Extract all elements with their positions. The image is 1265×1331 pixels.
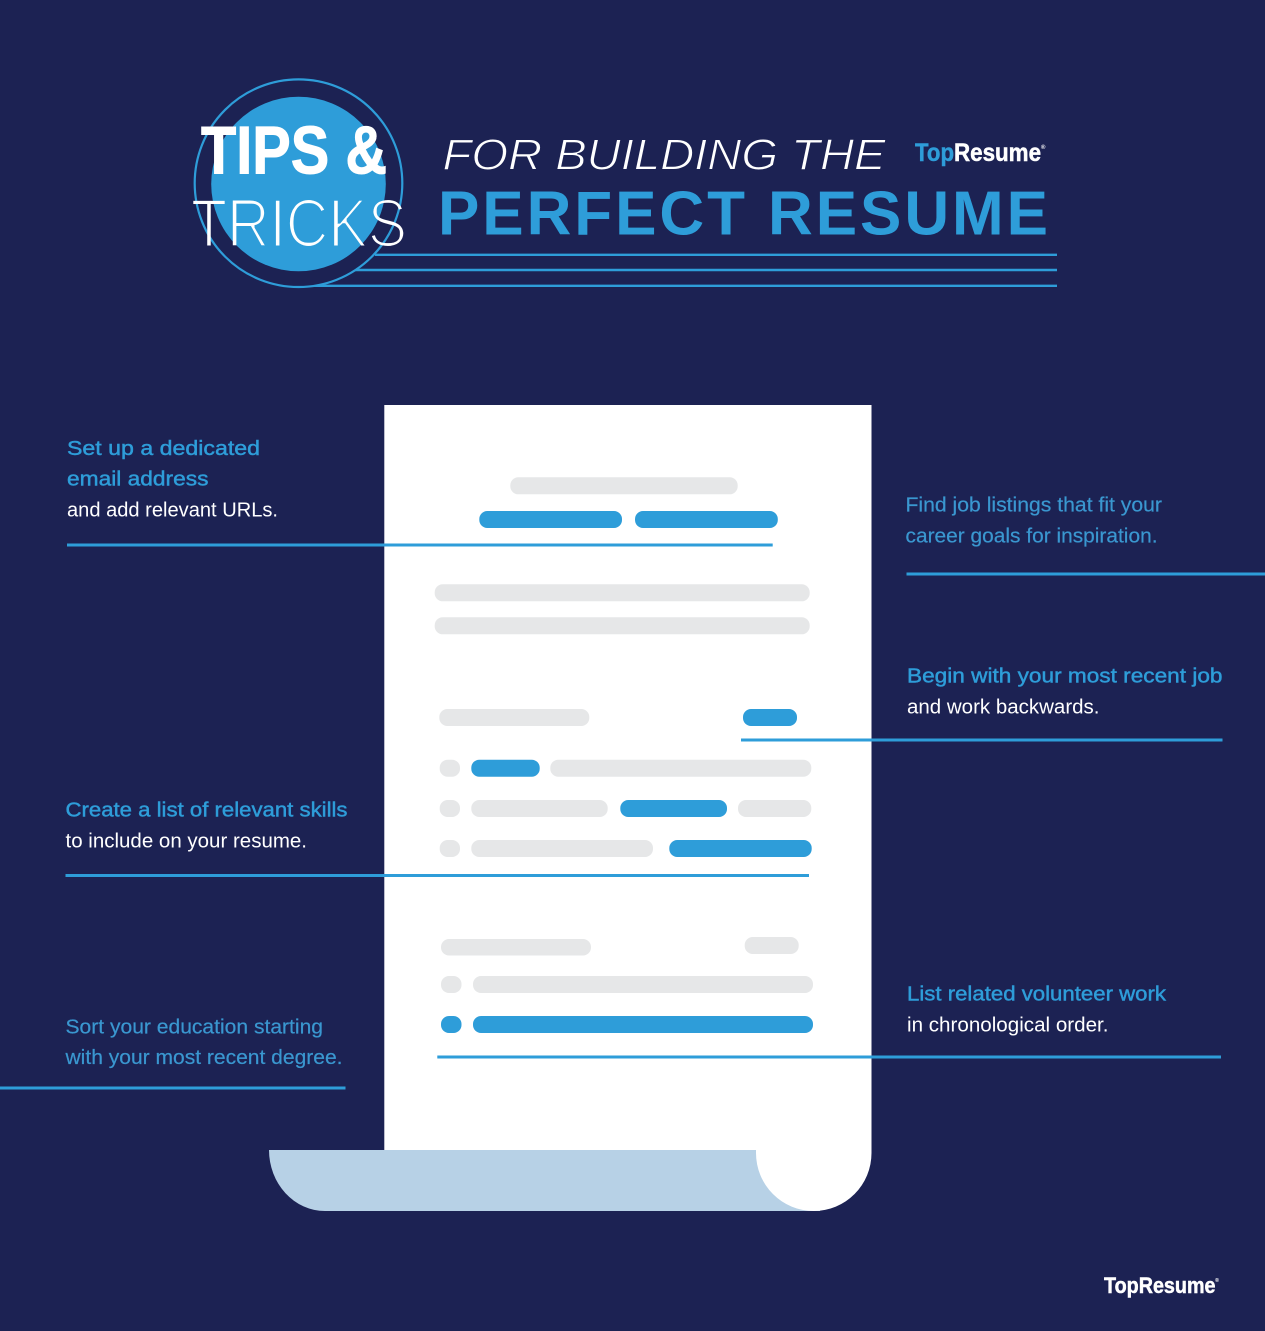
logo: TopResume footer: ®	[1215, 1277, 1219, 1284]
title: perfect resume: PERFECT RESUME	[438, 180, 1048, 248]
callout: recent job: and work backwards.	[907, 695, 1100, 718]
callout: relevant skills	[66, 799, 809, 876]
badge circle	[195, 79, 402, 287]
callout: volunteer work: in chronological order.	[907, 1013, 1108, 1036]
paper curl underside	[269, 1150, 820, 1211]
callout: volunteer work: List related volunteer work	[907, 983, 1167, 1006]
callout: dedicated email: and add relevant URLs.	[67, 498, 278, 521]
callout: job listings: Find job listings that fit your	[906, 494, 1162, 517]
paper sheet	[384, 405, 872, 1211]
resume paper	[269, 405, 872, 1211]
callout: education	[0, 1015, 346, 1088]
callout: education: with your most recent degree.	[64, 1046, 343, 1069]
resume header bars	[479, 477, 778, 528]
callout: recent job	[741, 664, 1222, 740]
callout: recent job: Begin with your most recent job	[907, 664, 1222, 687]
logo: TopResume header: ®	[1041, 144, 1046, 151]
resume summary bars	[435, 584, 810, 634]
callout: relevant skills: Create a list of relevant skills	[66, 799, 348, 822]
callout: job listings: career goals for inspiration.	[906, 524, 1158, 547]
logo: TopResume header: Top	[915, 139, 954, 167]
callout: volunteer work	[437, 983, 1221, 1057]
callout: relevant skills: to include on your resume.	[66, 829, 307, 852]
callout: dedicated email: email address	[67, 468, 208, 491]
title: tips and tricks	[191, 112, 407, 262]
logo: TopResume footer: TopResume	[1104, 1273, 1216, 1298]
logo: TopResume header: Resume	[954, 139, 1041, 167]
header underlines	[313, 255, 1057, 286]
callout: dedicated email	[67, 437, 773, 545]
resume experience bars	[439, 709, 812, 857]
callout: education: Sort your education starting	[66, 1015, 323, 1038]
title: tips and tricks: TRICKS	[191, 186, 407, 262]
title: for building the: FOR BUILDING THE	[442, 132, 887, 180]
header	[191, 79, 1057, 287]
callout: job listings	[906, 494, 1265, 574]
resume education bars	[441, 937, 813, 1033]
callout: dedicated email: Set up a dedicated	[67, 437, 260, 460]
logo: TopResume header	[915, 139, 1046, 167]
title: tips and tricks: TIPS &	[201, 112, 387, 188]
